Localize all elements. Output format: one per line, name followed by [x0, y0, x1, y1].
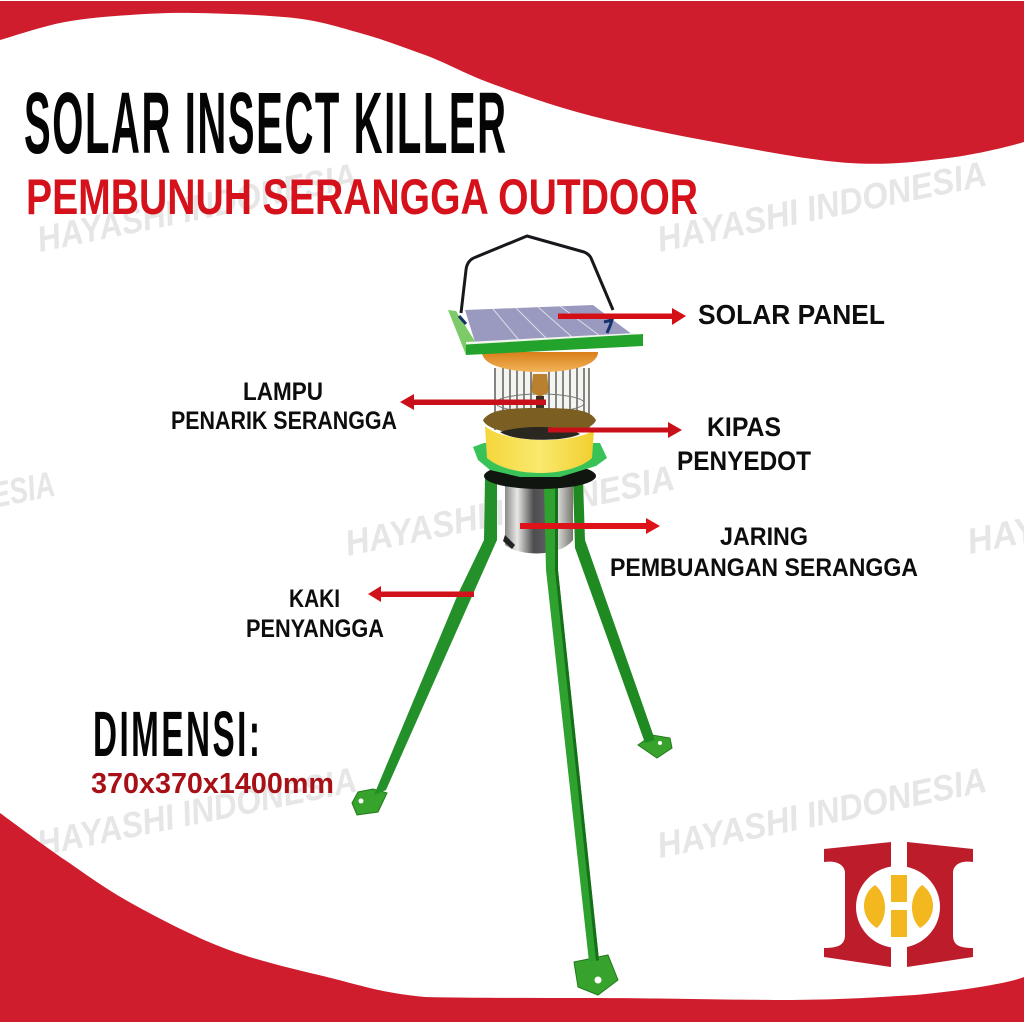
- black ring under plate: [484, 463, 596, 489]
- watermarks: HAYASHI INDONESIA: [33, 759, 360, 864]
- wire handle: [461, 236, 613, 313]
- green plate: [473, 443, 607, 477]
- arrow: lamp: [400, 394, 546, 410]
- watermarks: [0, 153, 1024, 866]
- watermarks: HAYASHI INDONESIA: [33, 155, 360, 260]
- label: net: PEMBUANGAN SERANGGA: [610, 554, 918, 582]
- title: SOLAR INSECT KILLER: [24, 76, 506, 172]
- yellow ring: [483, 408, 596, 473]
- dimension heading: DIMENSI:: [93, 698, 260, 770]
- net canister: [503, 483, 573, 553]
- label: lamp: LAMPU: [243, 378, 323, 406]
- subtitle: PEMBUNUH SERANGGA OUTDOOR: [26, 169, 698, 225]
- arrow: net: [520, 518, 660, 534]
- label: legs: PENYANGGA: [246, 615, 384, 643]
- cage with lamp: [494, 368, 589, 430]
- front leg and foot: [544, 487, 618, 995]
- label: legs: [246, 585, 384, 643]
- bottom red band: [0, 813, 1024, 1022]
- label: lamp: [171, 378, 397, 435]
- lamp bulb: [531, 374, 549, 397]
- logo: [824, 842, 973, 967]
- arrow: solar panel: [558, 308, 686, 325]
- label: lamp: PENARIK SERANGGA: [171, 407, 397, 435]
- orange cap: [482, 352, 598, 372]
- label: net: [610, 523, 918, 582]
- label: net: JARING: [720, 523, 808, 551]
- label: legs: KAKI: [289, 585, 340, 613]
- watermarks: HAYASHI INDONESIA: [653, 153, 990, 260]
- label: fan: [677, 412, 811, 476]
- label: fan: KIPAS: [707, 412, 781, 442]
- solar panel: [448, 305, 643, 355]
- handle clips: [459, 316, 612, 333]
- top red band: [0, 1, 1024, 164]
- label: fan: PENYEDOT: [677, 446, 811, 476]
- label: solar panel: SOLAR PANEL: [698, 299, 885, 330]
- arrow: fan: [548, 422, 682, 438]
- product: solar insect killer: [352, 236, 672, 995]
- dimension value: 370x370x1400mm: [91, 768, 334, 800]
- arrow: leg: [368, 586, 474, 602]
- watermarks: HAYASHI INDONESIA: [341, 457, 678, 564]
- watermarks: HAYASHI INDONESIA: [653, 759, 990, 866]
- back legs and feet: [352, 477, 672, 815]
